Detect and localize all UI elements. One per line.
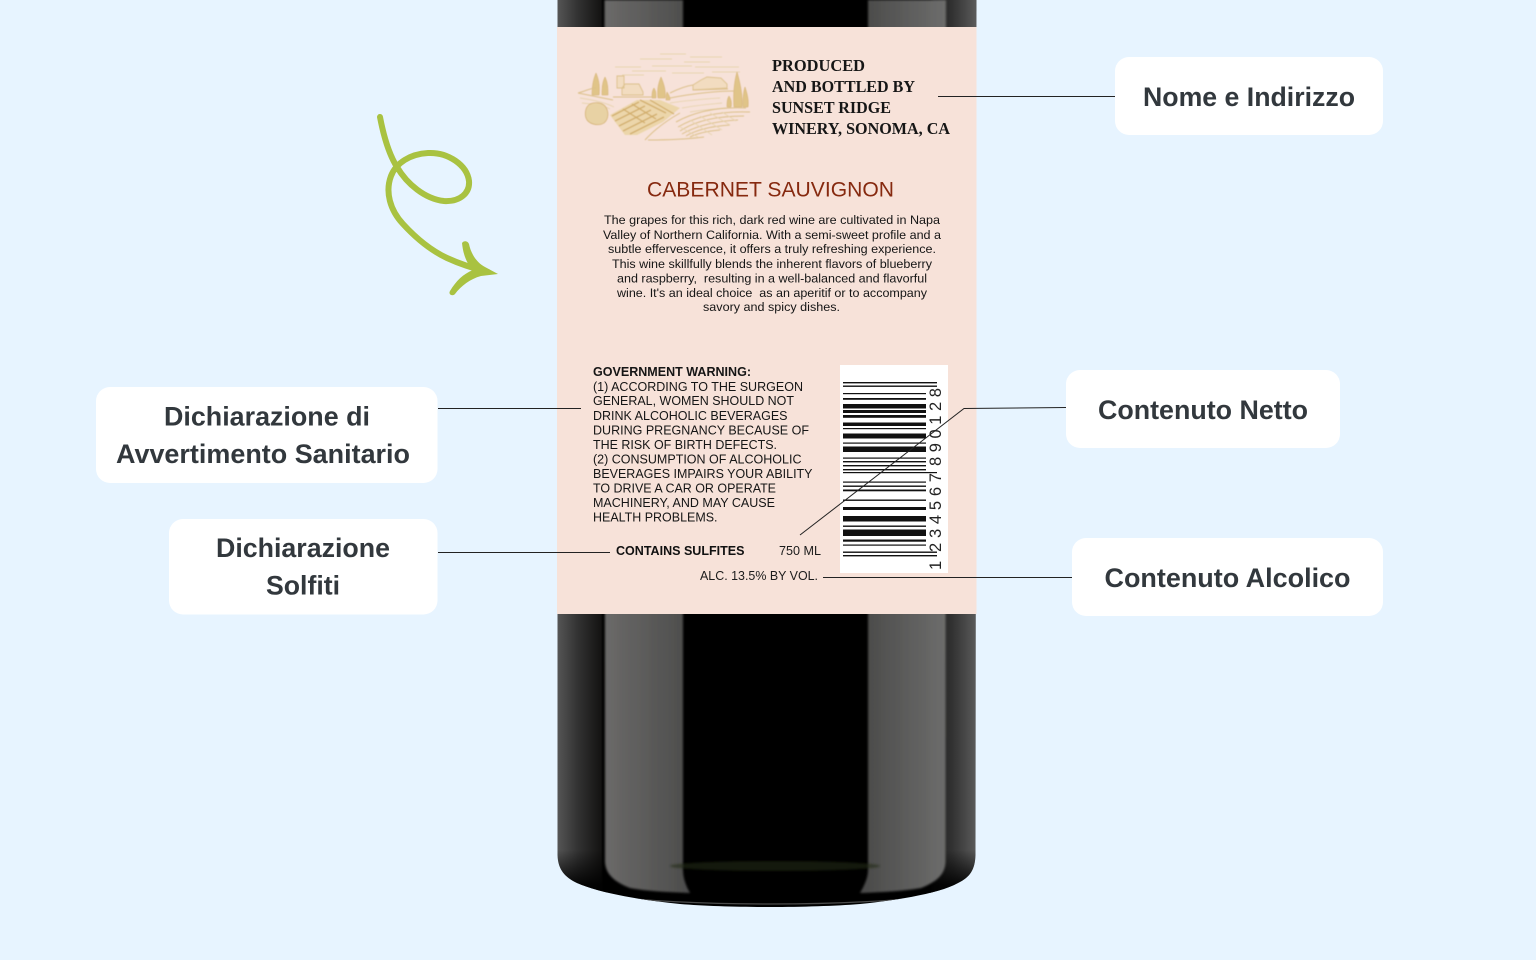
callout: Dichiarazione di Avvertimento Sanitario (96, 387, 438, 483)
callout: Dichiarazione di Avvertimento Sanitario: Avvertimento Sanitario (116, 439, 410, 469)
connector: sulfites (438, 552, 610, 554)
government warning text: MACHINERY, AND MAY CAUSE (593, 495, 775, 510)
wine description: This wine skillfully blends the inherent flavors of blueberry (612, 257, 933, 271)
barcode (840, 365, 948, 573)
government warning text: HEALTH PROBLEMS. (593, 510, 718, 524)
callout: Nome e Indirizzo (1115, 57, 1383, 135)
producer address: AND BOTTLED BY (772, 77, 915, 96)
producer address (772, 56, 951, 138)
barcode: 890128 (927, 388, 945, 466)
government warning text: (2) CONSUMPTION OF ALCOHOLIC (593, 452, 802, 466)
government warning text: DRINK ALCOHOLIC BEVERAGES (593, 408, 788, 423)
government warning text: GENERAL, WOMEN SHOULD NOT (593, 393, 794, 408)
government warning text: TO DRIVE A CAR OR OPERATE (593, 480, 776, 496)
wine name: CABERNET SAUVIGNON (647, 178, 894, 202)
callout: Contenuto Netto: Contenuto Netto (1098, 395, 1308, 425)
callout: Dichiarazione di Avvertimento Sanitario: Dichiarazione di (164, 402, 370, 432)
wine bottle (557, 0, 977, 910)
wine description: subtle effervescence, it offers a truly refreshing experience. (608, 242, 936, 256)
callout: Contenuto Alcolico (1072, 538, 1383, 616)
wine description: Valley of Northern California. With a semi-sweet profile and a (603, 228, 941, 242)
callout: Dichiarazione Solfiti: Dichiarazione (216, 533, 390, 563)
net contents: 750 ML (779, 544, 821, 558)
connector: net contents (800, 408, 1066, 535)
wine description: The grapes for this rich, dark red wine are cultivated in Napa (604, 213, 940, 227)
connector: name and address (938, 96, 1115, 98)
alcohol content: ALC. 13.5% BY VOL. (700, 569, 818, 583)
sulfites statement: CONTAINS SULFITES (616, 544, 744, 558)
callout: Contenuto Alcolico: Contenuto Alcolico (1104, 563, 1350, 593)
wine description: savory and spicy dishes. (703, 300, 840, 314)
wine label (557, 27, 976, 614)
barcode: 234567 (927, 473, 945, 552)
government warning text: THE RISK OF BIRTH DEFECTS. (593, 437, 777, 452)
producer address: WINERY, SONOMA, CA (772, 119, 951, 138)
government warning text: DURING PREGNANCY BECAUSE OF (593, 422, 809, 438)
callout: Dichiarazione Solfiti: Solfiti (266, 570, 340, 600)
producer address: SUNSET RIDGE (772, 98, 891, 117)
callout: Nome e Indirizzo: Nome e Indirizzo (1143, 82, 1355, 112)
government warning text: (1) ACCORDING TO THE SURGEON (593, 379, 803, 394)
callout: Dichiarazione Solfiti (169, 519, 438, 614)
barcode: 1 (927, 561, 945, 570)
wine description: wine. It's an ideal choice as an aperitif or to accompany (616, 286, 928, 300)
government warning text: BEVERAGES IMPAIRS YOUR ABILITY (593, 466, 813, 481)
vineyard illustration (578, 54, 750, 140)
connector: health warning (438, 408, 581, 410)
government warning text: GOVERNMENT WARNING: (593, 364, 751, 379)
producer address: PRODUCED (772, 56, 865, 75)
government warning text (593, 364, 813, 524)
connector: alcohol content (823, 576, 1072, 578)
wine description (603, 213, 941, 314)
callout: Contenuto Netto (1066, 370, 1340, 448)
wine description: and raspberry, resulting in a well-balanced and flavorful (617, 272, 927, 286)
green curly arrow (380, 117, 498, 295)
